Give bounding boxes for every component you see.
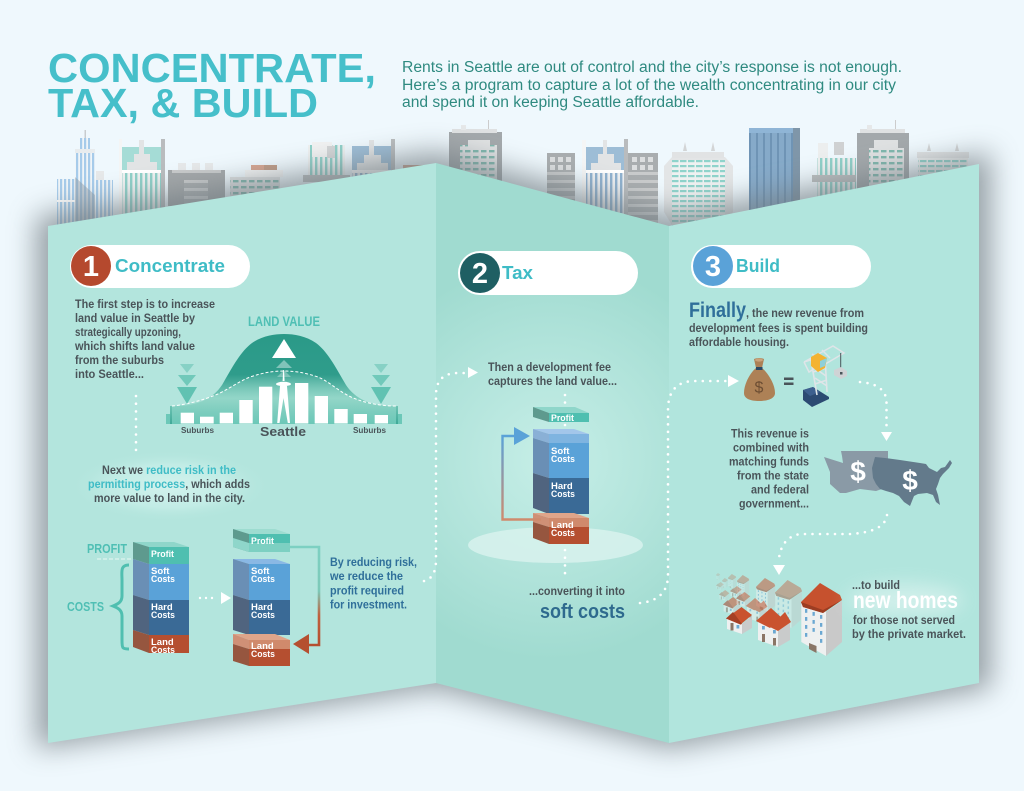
- next step text: [88, 463, 250, 505]
- icon: money bag: [744, 358, 775, 401]
- reducing risk text: By reducing risk,: [330, 555, 417, 569]
- new homes text: by the private market.: [852, 627, 966, 641]
- profit and costs labels: COSTS: [67, 599, 104, 614]
- stack after: Costs: [251, 610, 275, 621]
- land value chart: Seattle: [260, 425, 306, 439]
- icon: space needle: [276, 370, 291, 423]
- arrow: dotted to build step: [640, 375, 739, 603]
- arrow: dotted to maps: [860, 382, 892, 441]
- arrow: profit to land: [290, 547, 319, 654]
- reducing risk text: [329, 555, 417, 612]
- next step text: permitting process, which adds: [88, 477, 250, 491]
- stack after: Land: [251, 641, 274, 652]
- stack before: Soft: [151, 566, 170, 577]
- finally text: development fees is spent building: [689, 321, 868, 335]
- stack with arrow: Soft: [551, 446, 570, 457]
- reducing risk text: profit required: [330, 584, 404, 598]
- step 1 heading: [70, 245, 250, 288]
- stack before: Costs: [151, 574, 175, 585]
- arrow: dotted to tax step: [424, 367, 478, 581]
- stack after: Hard: [251, 602, 273, 613]
- intro text: Here’s a program to capture a lot of the wealth concentrating in our city: [402, 77, 896, 94]
- finally text: , the new revenue from: [746, 306, 864, 320]
- dotted arrow between stacks: [200, 592, 231, 604]
- stack after: [233, 529, 290, 666]
- title: [48, 45, 376, 126]
- step 3 heading: 3: [705, 251, 721, 283]
- first step text: strategically upzoning,: [75, 325, 181, 339]
- first step text: The first step is to increase: [75, 297, 215, 311]
- soft costs text: soft costs: [540, 601, 625, 623]
- finally text: affordable housing.: [689, 335, 789, 349]
- revenue text: matching funds: [729, 454, 809, 468]
- stack before: Land: [151, 637, 174, 648]
- new homes text: new homes: [853, 587, 958, 613]
- new homes text: for those not served: [853, 613, 955, 627]
- title: TAX, & BUILD: [48, 80, 318, 126]
- stack before: Profit: [151, 549, 175, 560]
- stack with arrow: [502, 407, 589, 544]
- skyline of buildings: [57, 120, 969, 229]
- icon: money bag: $: [755, 380, 764, 396]
- soft costs text: ...converting it into: [529, 584, 625, 598]
- revenue text: government...: [739, 496, 809, 510]
- stack after: Costs: [251, 574, 275, 585]
- stack after: Profit: [251, 536, 275, 547]
- intro text: Rents in Seattle are out of control and the city’s response is not enough.: [402, 59, 902, 76]
- first step text: land value in Seattle by: [75, 311, 195, 325]
- development fee text: Then a development fee: [488, 360, 611, 374]
- step 3 heading: [691, 245, 871, 288]
- step 3 heading: Build: [736, 256, 780, 276]
- revenue text: combined with: [733, 440, 809, 454]
- profit and costs labels: [67, 541, 133, 649]
- revenue text: This revenue is: [731, 426, 809, 440]
- land value chart: LAND VALUE: [248, 313, 320, 329]
- land value chart: Suburbs: [353, 426, 387, 435]
- icon: maps with dollars: [824, 451, 952, 506]
- arrow: dotted to houses: [773, 515, 887, 575]
- panel: concentrate: [48, 163, 436, 743]
- profit and costs labels: PROFIT: [87, 541, 127, 556]
- new homes text: [852, 578, 966, 641]
- land value chart: Suburbs: [181, 426, 215, 435]
- stack before: Costs: [151, 645, 175, 656]
- stack before: Costs: [151, 610, 175, 621]
- stack before: [133, 542, 189, 656]
- panel: build: [669, 164, 979, 743]
- stack before: Hard: [151, 602, 173, 613]
- step 2 heading: [458, 251, 638, 295]
- development fee text: [488, 360, 617, 388]
- first step text: from the suburbs: [75, 353, 164, 367]
- revenue text: and federal: [751, 482, 809, 496]
- intro text: [402, 59, 902, 111]
- stack with arrow: Costs: [551, 454, 575, 465]
- first step text: into Seattle...: [75, 367, 144, 381]
- step 2 heading: 2: [472, 258, 488, 290]
- icon: maps with dollars: $: [902, 465, 918, 496]
- reducing risk text: for investment.: [330, 598, 407, 612]
- land value chart: [166, 313, 402, 439]
- revenue text: [729, 426, 809, 510]
- equals sign: [784, 378, 794, 385]
- stack after: Soft: [251, 566, 270, 577]
- first step text: [74, 297, 215, 381]
- next step text: more value to land in the city.: [94, 491, 245, 505]
- finally text: [689, 299, 868, 349]
- step 2 heading: Tax: [502, 263, 533, 283]
- stack with arrow: Land: [551, 520, 574, 531]
- soft costs text: [529, 584, 625, 623]
- intro text: and spend it on keeping Seattle affordable.: [402, 94, 699, 111]
- step 1 heading: Concentrate: [115, 256, 225, 276]
- new homes text: ...to build: [852, 578, 900, 592]
- step 1 heading: 1: [83, 251, 99, 283]
- icon: houses: [716, 573, 842, 656]
- next step text: Next we reduce risk in the: [102, 463, 236, 477]
- development fee text: captures the land value...: [488, 374, 617, 388]
- stack with arrow: Costs: [551, 489, 575, 500]
- stack after: Costs: [251, 649, 275, 660]
- reducing risk text: we reduce the: [329, 569, 403, 583]
- icon: crane: [803, 346, 847, 407]
- first step text: which shifts land value: [74, 339, 195, 353]
- stack with arrow: Costs: [551, 528, 575, 539]
- stack with arrow: Hard: [551, 481, 573, 492]
- title: CONCENTRATE,: [48, 45, 376, 91]
- revenue text: from the state: [737, 468, 809, 482]
- panel: tax: [436, 163, 669, 743]
- icon: maps with dollars: $: [850, 456, 866, 487]
- stack with arrow: Profit: [551, 413, 575, 424]
- finally text: Finally: [689, 299, 746, 322]
